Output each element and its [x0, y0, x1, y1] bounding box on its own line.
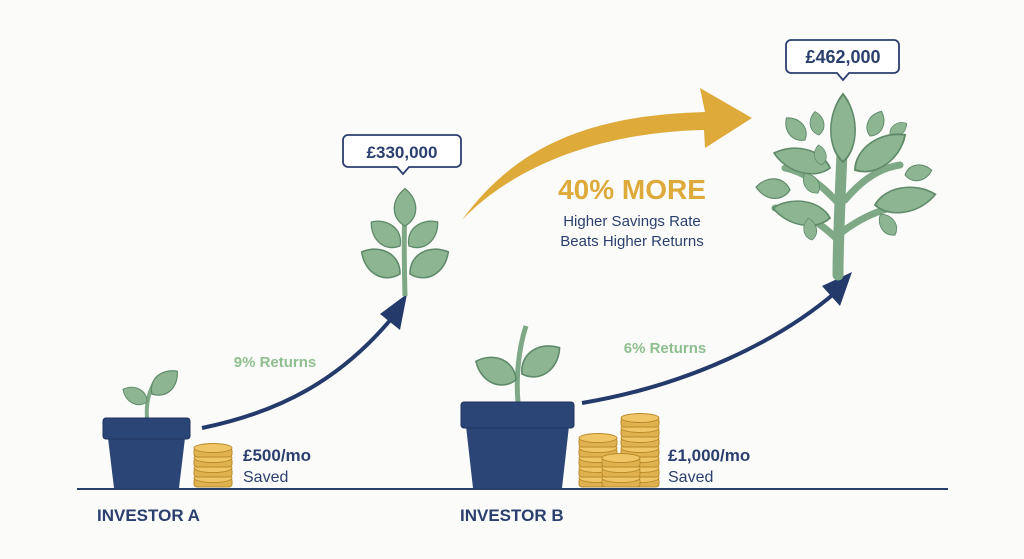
callout: £330,000: £330,000: [367, 143, 437, 162]
label: 9% returns: 9% Returns: [234, 354, 316, 371]
sprout B: [471, 326, 567, 402]
label: £1,000/mo saved: Saved: [668, 469, 713, 486]
headline: 40% MORE: Beats Higher Returns: [560, 233, 704, 250]
label: £1,000/mo saved: [668, 446, 750, 486]
sprout A: [119, 364, 184, 418]
label: £500/mo saved: £500/mo: [243, 446, 311, 465]
investor A group: [97, 364, 311, 525]
pot B: [461, 402, 574, 488]
coins A: [194, 444, 232, 487]
pot A: [103, 418, 190, 488]
headline: 40% MORE: 40% MORE: [558, 174, 706, 205]
label: £500/mo saved: Saved: [243, 469, 288, 486]
tree: [755, 94, 937, 275]
arrow B: 6% returns: [582, 272, 852, 403]
coins B: [579, 414, 659, 487]
headline: 40% MORE: [558, 174, 706, 250]
headline: 40% MORE: Higher Savings Rate: [563, 213, 701, 230]
investor B group: [460, 326, 750, 525]
investor A label: INVESTOR A: [97, 506, 200, 525]
label: 6% returns: 6% Returns: [624, 340, 706, 357]
callout: £462,000: £462,000: [805, 47, 881, 67]
callout: £462,000: [786, 40, 899, 80]
arrow A: 9% returns: [202, 294, 407, 428]
label: £1,000/mo saved: £1,000/mo: [668, 446, 750, 465]
investor B label: INVESTOR B: [460, 506, 564, 525]
callout: £330,000: [343, 135, 461, 174]
gold arrow: 40% more: [462, 88, 752, 220]
plant A: [355, 189, 455, 296]
label: £500/mo saved: [243, 446, 311, 486]
ground line: [77, 488, 948, 490]
